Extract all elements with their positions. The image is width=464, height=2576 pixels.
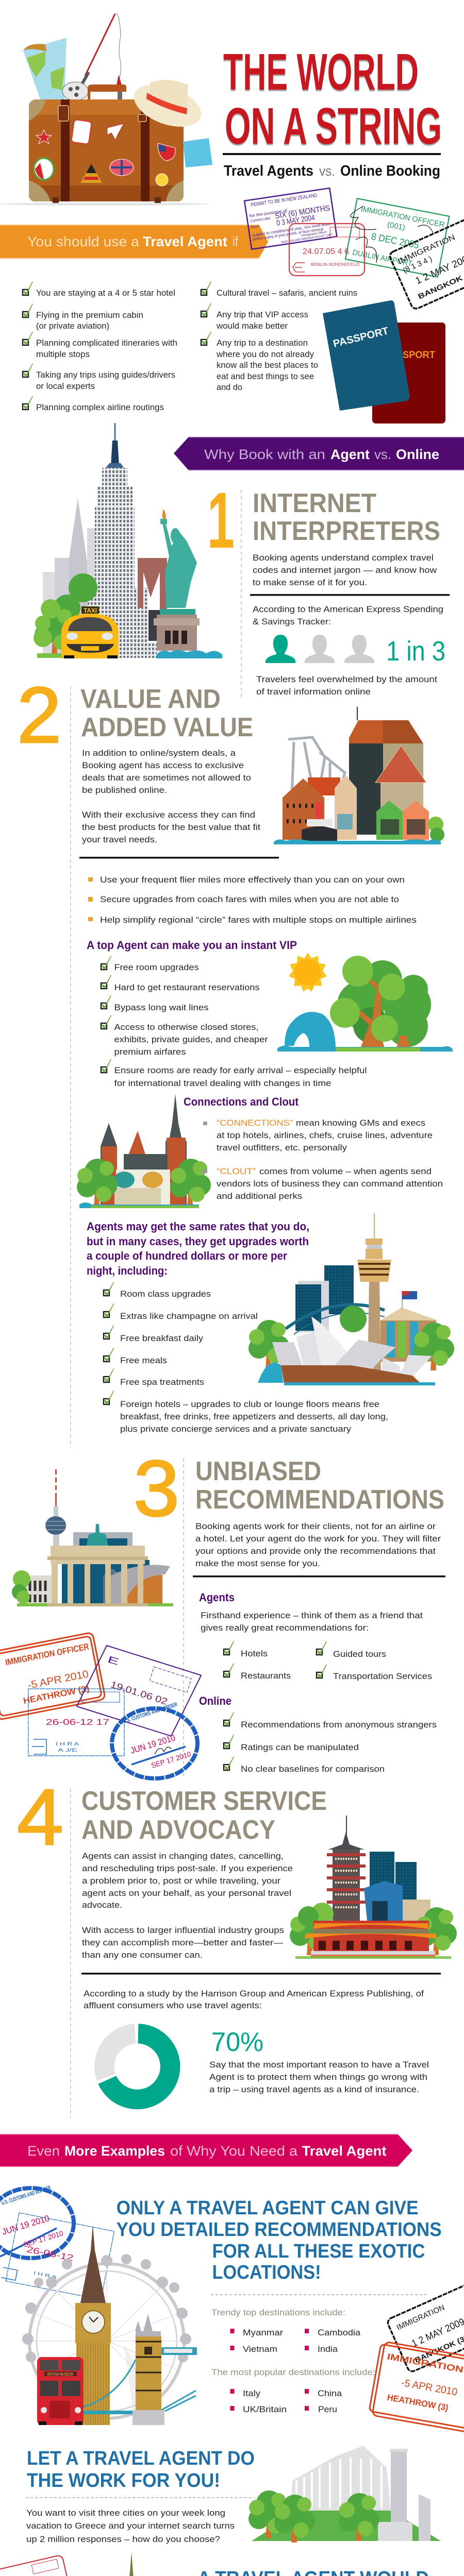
- stamp: new zealand permit: Immigration Officer: [301, 231, 327, 238]
- purple callout: agents get upgrades: but in many cases, they get upgrades worth: [87, 1235, 309, 1248]
- american express tracker text: According to the American Express Spending: [253, 604, 443, 614]
- stamp: heathrow repeat: IMMIGRATION: [386, 2351, 464, 2375]
- illustration: berlin: [12, 1469, 173, 1606]
- title: [223, 43, 442, 157]
- section 2 body text: Booking agent has access to exclusive: [82, 760, 244, 770]
- miles bullet list: [88, 875, 417, 925]
- stamp: blue arrivals box: 26-06-12 17: [46, 1717, 109, 1727]
- agents recommendations: [199, 1591, 432, 1681]
- vip checklist: Access to otherwise closed stores,: [114, 1022, 259, 1032]
- checklist: travel agent conditions: Planning complicated itineraries with: [36, 338, 177, 348]
- section 3 heading: unbiased recommendations: [195, 1456, 444, 1515]
- section 2 body text: deals that are sometimes not allowed to: [82, 773, 251, 783]
- heading: connections and clout: Connections and Clout: [184, 1095, 299, 1108]
- subtitle: [224, 163, 440, 179]
- online recommendations: No clear baselines for comparison: [241, 1764, 385, 1774]
- vip checklist: exhibits, private guides, and cheaper: [114, 1035, 268, 1044]
- stamp: dublin immigration officer: (001): [387, 220, 406, 232]
- heading: let a travel agent do the work: LET A TRAVEL AGENT DO: [27, 2448, 255, 2469]
- checklist: travel agent conditions: [23, 281, 357, 412]
- heading: let a travel agent do the work: THE WORK FOR YOU!: [27, 2470, 220, 2492]
- miles bullet list: Help simplify regional “circle” fares with multiple stops on multiple airlines: [100, 915, 417, 925]
- section 2 body text: your travel needs.: [82, 835, 157, 844]
- upgrades checklist: Room class upgrades: [120, 1289, 211, 1299]
- 70 percent stat text: [209, 2027, 429, 2094]
- upgrades checklist: [104, 1282, 388, 1434]
- stamp: heathrow immigration: -5 APR 2010: [27, 1668, 90, 1691]
- vip checklist: for international travel dealing with changes in time: [114, 1078, 331, 1088]
- section 4 body text: and rescheduling trips post-sale. If you experience: [82, 1863, 293, 1873]
- section 2 body text: [82, 748, 260, 844]
- purple callout: agents get upgrades: Agents may get the same rates that you do,: [87, 1220, 309, 1233]
- illustration: new york skyline and taxi: TAXI: [84, 607, 97, 614]
- stamp: us customs round: [112, 1701, 197, 1778]
- heading: only a travel agent: ONLY A TRAVEL AGENT CAN GIVE: [117, 2197, 419, 2219]
- vip checklist: Free room upgrades: [114, 962, 199, 972]
- section 4 body text: a problem prior to, post or while traveling, your: [82, 1876, 280, 1886]
- checklist: travel agent conditions: where you do not already: [216, 349, 314, 359]
- section 1 body text: codes and internet jargon — and know how: [253, 565, 437, 575]
- connections and clout bullets: and additional perks: [217, 1191, 302, 1201]
- connections and clout bullets: “CLOUT”: [217, 1166, 256, 1176]
- stamp: blue arrivals box: I H R A: [56, 1741, 79, 1747]
- upgrades checklist: breakfast, free drinks, free appetizers and desserts, all day long,: [120, 1412, 388, 1421]
- illustration: new orleans: [29, 2552, 171, 2576]
- miles bullet list: Use your frequent flier miles more effectively than you can on your own: [100, 875, 405, 885]
- agents recommendations: Agents: [199, 1591, 235, 1604]
- illustration: sydney: [248, 1213, 454, 1385]
- harrison group study text: According to a study by the Harrison Group and American Express Publishing, of: [84, 1989, 424, 1998]
- travelers overwhelmed caption: Travelers feel overwhelmed by the amount: [256, 674, 437, 684]
- stamp: black 12 may 2009 repeat: IMMIGRATION: [395, 2303, 446, 2332]
- section 2 body text: With their exclusive access they can find: [82, 810, 255, 820]
- checklist: travel agent conditions: You are staying at a 4 or 5 star hotel: [36, 288, 175, 298]
- upgrades checklist: plus private concierge services and a private sanctuary: [120, 1424, 352, 1434]
- agents recommendations: Hotels: [241, 1649, 268, 1658]
- stamp: new zealand permit: NEW ZEALAND IMMIGRATION ACT 1987: [281, 233, 333, 244]
- stamp: heathrow immigration: [0, 1632, 105, 1720]
- american express tracker text: [253, 604, 443, 626]
- destinations lists: UK/Britain: [243, 2404, 287, 2414]
- purple callout: agents get upgrades: night, including:: [87, 1264, 168, 1277]
- stamp: us customs round repeat: JUN 19 2010: [1, 2213, 51, 2237]
- banner: even more examples: of Why You Need a: [170, 2143, 298, 2159]
- stamp: dublin immigration officer: 8 DEC 2005: [370, 231, 420, 251]
- stamp: new zealand permit: Current ratio: [250, 216, 271, 224]
- illustration: sun, tree and wave: [277, 953, 453, 1052]
- banner: even more examples: Even: [27, 2143, 60, 2159]
- heading: only a travel agent: FOR ALL THESE EXOTIC: [212, 2241, 425, 2262]
- destinations lists: Trendy top destinations include:: [211, 2308, 345, 2317]
- connections and clout bullets: mean knowing GMs and execs: [296, 1118, 425, 1128]
- stamp: us customs round: SEP 17 2010: [150, 1750, 192, 1770]
- stamp: berlin schonefeld: BERLIN-SCHONEFELD: [311, 262, 359, 267]
- stamp: new zealand permit: for the purpose of ............................: [249, 202, 326, 218]
- illustration: london: BRITISH MUSEUM: [47, 2372, 73, 2377]
- checklist: travel agent conditions: and do: [217, 382, 242, 392]
- stamp: black 12 may 2009: IMMIGRATION: [396, 233, 457, 266]
- stamp: new zealand permit: subject to conditions of visa. You must leave: [252, 221, 332, 238]
- section 1 body text: Booking agents understand complex travel: [253, 553, 434, 563]
- online recommendations: Online: [199, 1694, 231, 1707]
- banner: why book with an agent vs online: vs.: [374, 447, 391, 462]
- 70 percent stat text: Say that the most important reason to have a Travel: [209, 2060, 429, 2070]
- section 1 body text: to make sense of it for you.: [253, 578, 367, 587]
- stamp: new zealand permit: [244, 188, 337, 249]
- destinations lists: The most popular destinations include:: [211, 2367, 375, 2377]
- connections and clout bullets: “CONNECTIONS”: [217, 1118, 293, 1128]
- american express tracker text: & Savings Tracker:: [253, 617, 331, 626]
- donut chart: 70 percent: [104, 2033, 170, 2099]
- destinations lists: [211, 2308, 375, 2414]
- heading: let a travel agent do the work: [27, 2448, 255, 2492]
- checklist: travel agent conditions: would make better: [216, 321, 288, 331]
- stamp: berlin repeat: [0, 2555, 74, 2576]
- illustration: castle: [77, 1094, 211, 1208]
- heading: only a travel agent: LOCATIONS!: [212, 2262, 321, 2283]
- online recommendations: Recommendations from anonymous strangers: [241, 1720, 437, 1730]
- stamp: black 12 may 2009 repeat: [386, 2280, 464, 2373]
- greece body text: up 2 million responses – how do you choose?: [26, 2534, 220, 2544]
- section 3 body text: make the most sense for you.: [195, 1558, 320, 1568]
- checklist: travel agent conditions: Flying in the premium cabin: [36, 310, 143, 320]
- section 3 body text: Booking agents work for their clients, not for an airline or: [195, 1521, 436, 1531]
- banner: why book with an agent vs online: Online: [396, 447, 439, 462]
- destinations lists: Vietnam: [243, 2344, 277, 2354]
- banner: even more examples: More Examples: [64, 2143, 165, 2159]
- stamp: black 12 may 2009: (8 1 3 4 ): [402, 255, 434, 275]
- icon: passports: SPORT: [403, 350, 435, 361]
- illustration: greece: [248, 2446, 441, 2543]
- purple callout: agents get upgrades: [87, 1220, 309, 1277]
- stamp: us customs round: U.S. CUSTOMS AND BORDER: [122, 1701, 178, 1725]
- section 1 heading: internet interpreters: INTERNET: [253, 488, 376, 518]
- section 1 number: 1: [207, 476, 235, 565]
- illustration: china: [290, 1816, 457, 1959]
- checklist: travel agent conditions: Any trip that VIP access: [217, 310, 308, 319]
- stamp: new zealand permit: from: [251, 224, 260, 229]
- stamp: black 12 may 2009 repeat: BANGKOK (3): [413, 2334, 464, 2364]
- section 2 heading: value and added value: [80, 684, 253, 742]
- destinations lists: Myanmar: [243, 2328, 283, 2337]
- icon: passports: [323, 300, 445, 423]
- connections and clout bullets: comes from volume – when agents send: [259, 1166, 432, 1176]
- destinations lists: Italy: [243, 2388, 261, 2398]
- section 1 heading: internet interpreters: INTERPRETERS: [253, 516, 440, 546]
- checklist: travel agent conditions: Planning complex airline routings: [36, 402, 164, 412]
- stamp: new zealand permit: 0 3 MAY 2004: [276, 213, 316, 228]
- section 4 body text: Agents can assist in changing dates, cancelling,: [82, 1851, 284, 1861]
- section 2 body text: the best products for the best value that fit: [82, 822, 260, 832]
- suitcase illustration with map, rod and hat: [0, 14, 212, 206]
- stamp: new zealand permit: PERMIT TO BE IN NEW ZEALAND: [251, 193, 318, 208]
- stamp: black 12 may 2009: BANGKOK (3): [417, 268, 464, 300]
- section 2 heading: value and added value: ADDED VALUE: [81, 713, 253, 742]
- illustration: gdansk harbour: [274, 707, 444, 844]
- stamp: us customs round repeat: [0, 2185, 74, 2258]
- travelers overwhelmed caption: of travel information online: [256, 687, 371, 697]
- connections and clout bullets: at top hotels, airlines, chefs, cruise lines, adventure: [217, 1130, 433, 1140]
- connections and clout bullets: [203, 1118, 443, 1201]
- heading: only a travel agent: YOU DETAILED RECOMMENDATIONS: [117, 2219, 442, 2241]
- banner: you should use a travel agent if: Travel Agent: [143, 234, 227, 249]
- agents recommendations: Transportation Services: [333, 1671, 432, 1681]
- 70 percent stat text: 70%: [211, 2027, 263, 2057]
- section 3 heading: unbiased recommendations: UNBIASED: [195, 1456, 321, 1486]
- checklist: travel agent conditions: multiple stops: [36, 349, 90, 359]
- section 3 number: 3: [134, 1444, 179, 1533]
- banner: why book with an agent vs online: Agent: [330, 447, 370, 462]
- stamp: blue arrivals box repeat: [1, 2212, 114, 2299]
- icon chart: 1 in 3 people: [266, 635, 445, 667]
- section 2 number: 2: [17, 671, 61, 759]
- destinations lists: India: [318, 2344, 338, 2354]
- stamp: barcelona: E: [106, 1654, 120, 1667]
- harrison group study text: affluent consumers who use travel agents:: [84, 2001, 262, 2010]
- greece body text: vacation to Greece and your internet search turns: [26, 2521, 235, 2531]
- section 4 body text: With access to larger influential industry groups: [82, 1925, 284, 1935]
- stamp: heathrow repeat: -5 APR 2010: [401, 2377, 458, 2398]
- 70 percent stat text: Agent is to protect them when things go wrong with: [209, 2072, 427, 2082]
- destinations lists: Peru: [318, 2404, 337, 2414]
- section 2 heading: value and added value: VALUE AND: [80, 684, 221, 714]
- section 2 body text: be published online.: [82, 785, 167, 795]
- destinations lists: Cambodia: [318, 2328, 361, 2337]
- illustration: london: [22, 2225, 197, 2425]
- section 1 heading: internet interpreters: [253, 488, 440, 546]
- 70 percent stat text: a trip – using travel agents as a kind of insurance.: [209, 2084, 419, 2094]
- subtitle: vs.: [319, 163, 335, 179]
- stamp: us customs round: JUN 19 2010: [129, 1733, 176, 1756]
- section 4 body text: [82, 1851, 293, 1960]
- checklist: travel agent conditions: Any trip to a destination: [217, 338, 308, 348]
- stamp: blue arrivals box repeat: 26-06-12: [26, 2244, 74, 2263]
- vip checklist: [101, 956, 367, 1088]
- stamp: blue arrivals box: A J/E: [58, 1748, 77, 1753]
- stamp: berlin schonefeld: [289, 224, 364, 276]
- checklist: travel agent conditions: Taking any trips using guides/drivers: [36, 370, 175, 380]
- upgrades checklist: Free breakfast daily: [120, 1333, 204, 1343]
- section 2 body text: In addition to online/system deals, a: [82, 748, 236, 758]
- stamp: black 12 may 2009: [388, 214, 464, 310]
- section 4 number: 4: [17, 1773, 63, 1861]
- online recommendations: Ratings can be manipulated: [241, 1742, 359, 1752]
- section 3 body text: a hotel. Let your agent do the work for you. They will filter: [195, 1534, 441, 1544]
- banner: why book with an agent vs online: Why Book with an: [204, 447, 325, 462]
- vip checklist: Hard to get restaurant reservations: [114, 982, 260, 992]
- section 3 body text: [195, 1521, 441, 1568]
- online recommendations: [199, 1694, 437, 1774]
- subtitle: Online Booking: [340, 163, 440, 179]
- agents recommendations: Firsthand experience – think of them as a friend that: [201, 1611, 423, 1620]
- stamp: heathrow immigration: HEATHROW (3): [22, 1684, 90, 1706]
- stamp: new zealand permit: before expiry of your permit, or face removal.: [253, 227, 325, 242]
- stamp: blue arrivals box repeat: I H R A: [33, 2270, 57, 2280]
- connections and clout bullets: travel outfitters, etc. personally: [217, 1143, 347, 1153]
- section 4 heading: customer service and advocacy: CUSTOMER SERVICE: [81, 1786, 327, 1816]
- destinations lists: China: [318, 2388, 342, 2398]
- stamp: new zealand permit: SIX (6) MONTHS: [274, 204, 330, 221]
- section 1 body text: [253, 553, 437, 587]
- section 4 heading: customer service and advocacy: AND ADVOCACY: [81, 1815, 275, 1845]
- icon chart: 1 in 3 people: 1 in 3: [386, 636, 445, 667]
- upgrades checklist: Foreign hotels – upgrades to club or lounge floors means free: [120, 1399, 379, 1409]
- agents recommendations: gives really great recommendations for:: [201, 1623, 369, 1633]
- stamp: barcelona: 19.01.06 02: [109, 1679, 169, 1707]
- checklist: travel agent conditions: eat and best things to see: [217, 371, 314, 381]
- miles bullet list: Secure upgrades from coach fares with miles when you are not able to: [100, 894, 399, 904]
- vip checklist: premium airfares: [114, 1047, 186, 1057]
- illustration: new york skyline and taxi: [34, 423, 222, 658]
- banner: you should use a travel agent if: [0, 225, 268, 259]
- stamp: heathrow immigration: IMMIGRATION OFFICER: [5, 1641, 90, 1667]
- purple callout: agents get upgrades: a couple of hundred dollars or more per: [87, 1249, 287, 1262]
- upgrades checklist: Extras like champagne on arrival: [120, 1311, 258, 1321]
- stamp: heathrow repeat: [369, 2341, 464, 2434]
- heading: instant vip: A top Agent can make you an instant VIP: [87, 939, 297, 952]
- banner: you should use a travel agent if: if: [233, 234, 238, 249]
- section 4 body text: advocate.: [82, 1900, 122, 1910]
- heading: only a travel agent: [117, 2197, 442, 2283]
- section 4 heading: customer service and advocacy: [81, 1786, 327, 1845]
- stamp: us customs round repeat: SEP 17 2010: [22, 2229, 64, 2249]
- banner: why book with an agent vs online: [174, 437, 464, 470]
- vip checklist: Ensure rooms are ready for early arrival – especially helpful: [114, 1065, 367, 1075]
- stamp: dublin immigration officer: IMMIGRATION OFFICER: [360, 205, 445, 229]
- section 3 body text: your options and provide only the recommendations that: [195, 1546, 436, 1556]
- section 4 body text: agent acts on your behalf, as your personal travel: [82, 1888, 291, 1898]
- upgrades checklist: Free spa treatments: [120, 1377, 204, 1387]
- stamp: berlin schonefeld: 24.07.05 4 6: [303, 247, 349, 256]
- signature scribbles: [351, 206, 433, 263]
- checklist: travel agent conditions: or local experts: [36, 381, 95, 391]
- stamp: heathrow repeat: HEATHROW (3): [386, 2393, 449, 2413]
- connections and clout bullets: vendors lots of business they can command attention: [217, 1179, 443, 1189]
- greece body text: You want to visit three cities on your week long: [26, 2508, 225, 2518]
- stamp: dublin immigration officer: [345, 198, 449, 277]
- vip checklist: Bypass long wait lines: [114, 1003, 208, 1012]
- checklist: travel agent conditions: (or private aviation): [36, 321, 109, 331]
- agents recommendations: Guided tours: [333, 1649, 386, 1659]
- section 4 body text: than any one consumer can.: [82, 1950, 203, 1960]
- stamp: blue arrivals box: [28, 1689, 124, 1756]
- subtitle: Travel Agents: [224, 163, 313, 179]
- icon: passports: PASSPORT: [332, 325, 390, 350]
- banner: you should use a travel agent if: You should use a: [27, 234, 140, 249]
- stamp: dublin immigration officer: DUBLIN AIRPORT: [352, 248, 413, 268]
- section 4 body text: they can accomplish more—better and faster—: [82, 1938, 283, 1947]
- checklist: travel agent conditions: know all the best places to: [217, 360, 318, 370]
- greece body text: [26, 2508, 235, 2544]
- upgrades checklist: Free meals: [120, 1355, 167, 1365]
- banner: even more examples: Travel Agent: [302, 2143, 387, 2159]
- stamp: us customs round repeat: U.S. CUSTOMS AND BORDER: [1, 2185, 52, 2207]
- checklist: travel agent conditions: Cultural travel – safaris, ancient ruins: [217, 288, 357, 298]
- stamp: barcelona: [77, 1642, 201, 1739]
- banner: even more examples: [0, 2134, 412, 2167]
- travelers overwhelmed caption: [256, 674, 437, 697]
- agents recommendations: Restaurants: [241, 1671, 291, 1681]
- harrison group study text: [84, 1989, 424, 2010]
